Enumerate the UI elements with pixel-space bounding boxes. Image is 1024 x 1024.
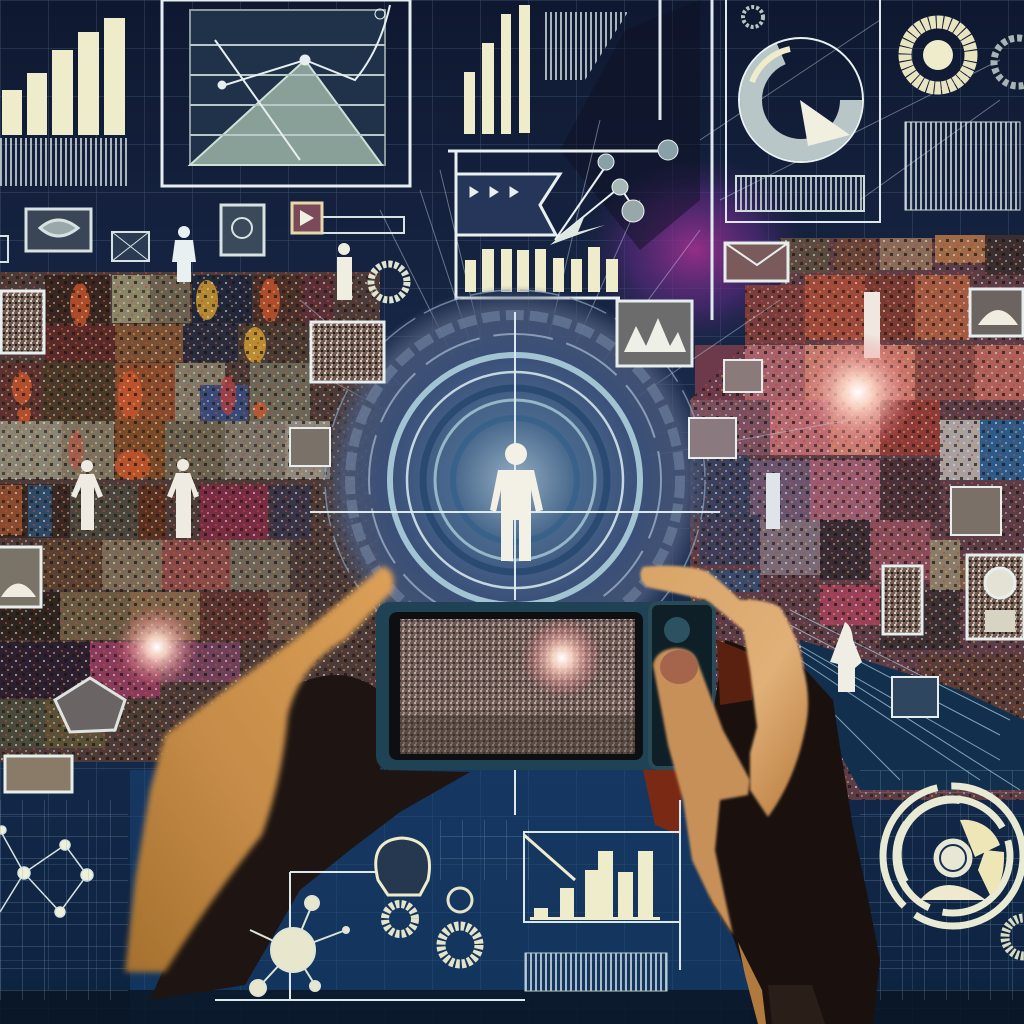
camera button	[664, 617, 690, 643]
icon: network bottom-left	[0, 826, 93, 917]
icons: row of small frames left	[0, 203, 404, 262]
light flare left	[115, 605, 199, 689]
icon: white person tall	[337, 243, 352, 300]
icon: white person right A	[864, 292, 880, 358]
icon: white person small top	[172, 226, 196, 282]
right wrist shade	[768, 985, 825, 1024]
icon: small gear	[371, 264, 407, 300]
icon: top-right gears	[743, 7, 1024, 88]
chart: lower centre bars	[524, 835, 660, 920]
icon: white person right C	[830, 622, 862, 692]
icon: white person left B	[167, 459, 199, 538]
panel: upper-right divider lines	[660, 0, 880, 320]
right hand red shadow	[643, 770, 683, 835]
camera screen	[400, 619, 635, 754]
icon: web frame	[55, 678, 125, 732]
icon: gears lower centre	[385, 888, 479, 964]
icon: white person left A	[71, 460, 103, 530]
grid panel bottom-right	[860, 770, 1024, 1000]
chart: hatched strip	[525, 953, 667, 991]
perspective rays lower right	[790, 610, 1020, 790]
right hand thumb	[653, 648, 750, 935]
camera	[376, 602, 714, 770]
icon: hub and spoke	[250, 896, 349, 996]
grid panel bottom-left	[0, 800, 128, 1000]
icons: mosaic frames and people left	[0, 291, 384, 792]
chart: top-left bar chart	[0, 18, 128, 186]
right hand thumb nail	[660, 650, 698, 684]
icon: light bulb	[376, 838, 430, 895]
chart: right grids	[736, 122, 1020, 211]
dark wedge upper centre	[560, 0, 700, 250]
left hand shadow	[150, 675, 470, 1000]
grid panel bottom-centre	[440, 820, 530, 880]
dark blue ray field lower right	[800, 640, 1024, 790]
right wrist	[738, 942, 766, 1024]
right hand index finger	[640, 566, 808, 817]
bottom dark band	[0, 990, 1024, 1024]
light flare upper right	[798, 332, 918, 452]
people dots	[12, 278, 280, 480]
icon: white person right B	[766, 473, 780, 529]
chart: centre tall bars	[464, 5, 628, 134]
icon: central person	[490, 443, 543, 561]
centre circular hud	[310, 285, 720, 675]
icon: gear bottom-right edge	[1005, 918, 1024, 956]
right hand dark back	[700, 640, 880, 1024]
purple glow top right	[585, 155, 805, 345]
chart: donut gauge	[739, 38, 863, 162]
left hand	[125, 566, 394, 972]
panel: centre dashboard	[448, 140, 678, 300]
scratch lines upper centre	[300, 20, 1000, 480]
photo mosaic: right	[690, 235, 1024, 800]
photo mosaic: left	[0, 272, 380, 762]
chart: line chart panel	[162, 0, 410, 186]
panel: lower centre outline	[215, 770, 680, 1000]
icon: radial wheel bottom-right	[883, 786, 1023, 926]
icons: mosaic frames right	[617, 243, 1024, 717]
lower centre blue field	[130, 770, 750, 1024]
